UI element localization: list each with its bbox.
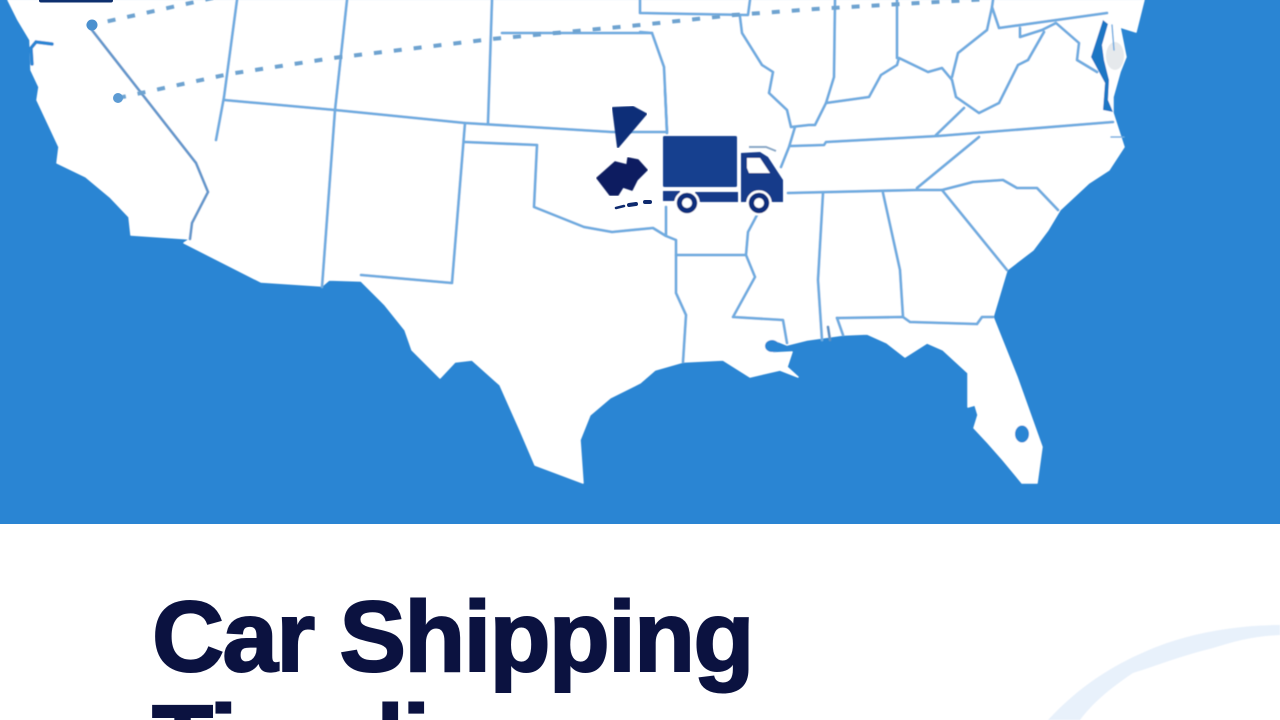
- Lake Pontchartrain: [765, 340, 779, 352]
- rear wheel: [676, 192, 698, 214]
- panel: white title area: [0, 524, 1280, 720]
- Florida lake: [1015, 426, 1029, 442]
- cab window: [747, 158, 770, 173]
- icon: delivery truck: [663, 136, 783, 214]
- truck cab: [741, 152, 783, 202]
- icon: navy wedge: [613, 107, 646, 147]
- front hub: [754, 198, 764, 208]
- title: Car Shipping: [152, 581, 753, 693]
- truck cargo box: [663, 136, 737, 187]
- icon: small motion dashes: [616, 202, 650, 208]
- rear hub: [682, 198, 692, 208]
- dashed route: northern: [88, 0, 240, 25]
- land: southern United States: [8, 0, 1144, 483]
- decorative pale arc: [1048, 625, 1280, 720]
- truck chassis: [663, 191, 738, 202]
- route start dot: north: [86, 20, 98, 30]
- US map: [8, 0, 1144, 483]
- cab top highlight: [749, 147, 776, 151]
- icon: navy arrows blob: [597, 158, 647, 195]
- route start dot: central: [113, 93, 123, 103]
- panel: map background water: [0, 0, 1280, 524]
- top-left navy marker: [39, 0, 113, 2]
- front wheel: [748, 192, 770, 214]
- Delmarva shading: [1106, 42, 1124, 70]
- San Francisco Bay: [31, 42, 52, 64]
- dashed route: central: [118, 0, 990, 98]
- Chesapeake Bay: [1091, 20, 1113, 112]
- state borders: [88, 0, 1124, 362]
